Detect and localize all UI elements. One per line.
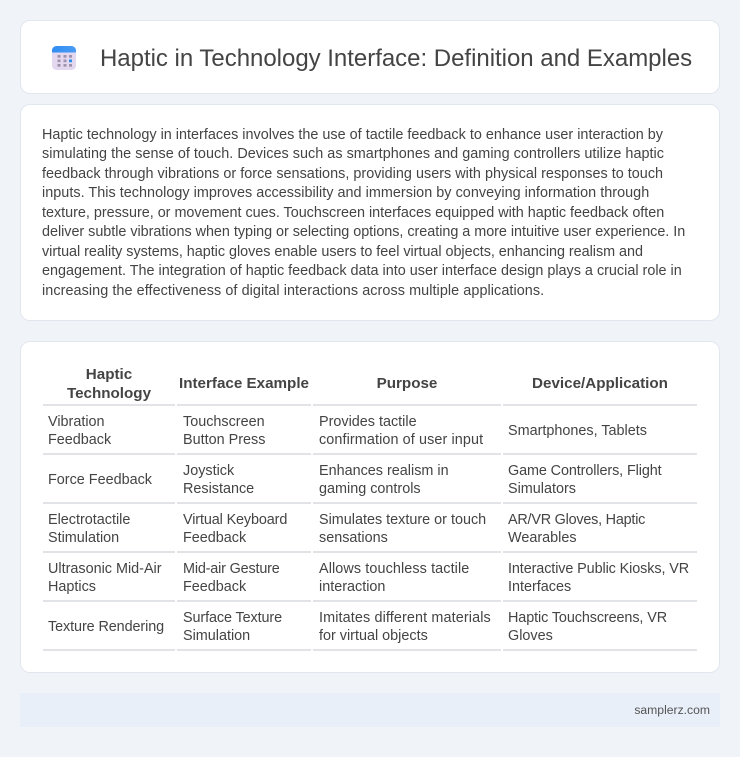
row: ultrasonic mid-air haptics: interaction: [319, 579, 385, 595]
row: force feedback: Enhances realism in: [319, 463, 449, 479]
intro text panel: texture, pressure, or movement cues. Touchscreen interfaces equipped with haptic feedback often: [42, 205, 664, 221]
row: texture rendering: Surface Texture: [183, 610, 282, 626]
table header row: Device/Application: [532, 375, 668, 392]
intro text panel: virtual reality systems, haptic gloves enable users to feel virtual objects, enhancing realism and: [42, 244, 643, 260]
footer text: samplerz.com: [634, 703, 710, 717]
row: texture rendering: Haptic Touchscreens, VR: [508, 610, 667, 626]
row: force feedback: [43, 463, 697, 504]
row: ultrasonic mid-air haptics: Feedback: [183, 579, 246, 595]
header panel: [20, 20, 720, 94]
intro text panel: deliver subtle vibrations when typing or selecting options, creating a more intuitive user experience. In: [42, 224, 685, 240]
intro text panel: inputs. This technology improves accessibility and immersion by conveying information through: [42, 185, 649, 201]
row: ultrasonic mid-air haptics: Mid-air Gesture: [183, 561, 280, 577]
intro text panel: Haptic technology in interfaces involves the use of tactile feedback to enhance user interaction by: [42, 127, 663, 143]
row: ultrasonic mid-air haptics: Ultrasonic Mid-Air: [48, 561, 162, 577]
row: electrotactile stimulation: Simulates texture or touch: [319, 512, 486, 528]
row: force feedback: gaming controls: [319, 481, 421, 497]
table panel: [20, 341, 720, 673]
intro text panel: [20, 104, 720, 321]
row: texture rendering: Imitates different materials: [319, 610, 491, 626]
row: force feedback: Joystick: [183, 463, 234, 479]
row: force feedback: Resistance: [183, 481, 254, 497]
table header row: Interface Example: [179, 375, 309, 392]
row: electrotactile stimulation: sensations: [319, 530, 388, 546]
row: vibration feedback: confirmation of user input: [319, 432, 483, 448]
intro text panel: engagement. The integration of haptic feedback data into user interface design plays a crucial role in: [42, 263, 682, 279]
row: vibration feedback: Feedback: [48, 432, 111, 448]
row: vibration feedback: Touchscreen: [183, 414, 265, 430]
row: electrotactile stimulation: Stimulation: [48, 530, 119, 546]
row: texture rendering: [43, 610, 697, 651]
title: Haptic in Technology Interface: Definition and Examples: [100, 45, 692, 72]
row: electrotactile stimulation: Electrotactile: [48, 512, 130, 528]
intro text panel: simulating the sense of touch. Devices such as smartphones and gaming controllers utilize haptic: [42, 146, 664, 162]
row: force feedback: Game Controllers, Flight: [508, 463, 662, 479]
row: texture rendering: for virtual objects: [319, 628, 428, 644]
footer bar: [20, 693, 720, 727]
row: texture rendering: Gloves: [508, 628, 553, 644]
row: electrotactile stimulation: [43, 512, 697, 553]
row: vibration feedback: [43, 414, 697, 455]
row: electrotactile stimulation: AR/VR Gloves, Haptic: [508, 512, 645, 528]
intro text panel: feedback through vibrations or force sensations, providing users with physical responses to touch: [42, 166, 663, 182]
row: vibration feedback: Provides tactile: [319, 414, 417, 430]
icon: calendar: [52, 46, 76, 70]
row: ultrasonic mid-air haptics: Haptics: [48, 579, 96, 595]
row: texture rendering: Texture Rendering: [48, 619, 164, 635]
row: vibration feedback: Button Press: [183, 432, 265, 448]
row: electrotactile stimulation: Wearables: [508, 530, 577, 546]
table header row: Haptic: [86, 366, 132, 383]
row: force feedback: Force Feedback: [48, 472, 152, 488]
row: texture rendering: Simulation: [183, 628, 250, 644]
row: vibration feedback: Smartphones, Tablets: [508, 423, 647, 439]
table header row: [43, 366, 697, 406]
row: electrotactile stimulation: Virtual Keyboard: [183, 512, 287, 528]
row: ultrasonic mid-air haptics: Interactive Public Kiosks, VR: [508, 561, 689, 577]
row: ultrasonic mid-air haptics: [43, 561, 697, 602]
row: ultrasonic mid-air haptics: Interfaces: [508, 579, 571, 595]
row: vibration feedback: Vibration: [48, 414, 105, 430]
intro text panel: increasing the effectiveness of digital interactions across multiple applications.: [42, 283, 544, 299]
row: electrotactile stimulation: Feedback: [183, 530, 246, 546]
row: force feedback: Simulators: [508, 481, 576, 497]
table header row: Technology: [67, 385, 151, 402]
row: ultrasonic mid-air haptics: Allows touchless tactile: [319, 561, 469, 577]
table header row: Purpose: [377, 375, 437, 392]
